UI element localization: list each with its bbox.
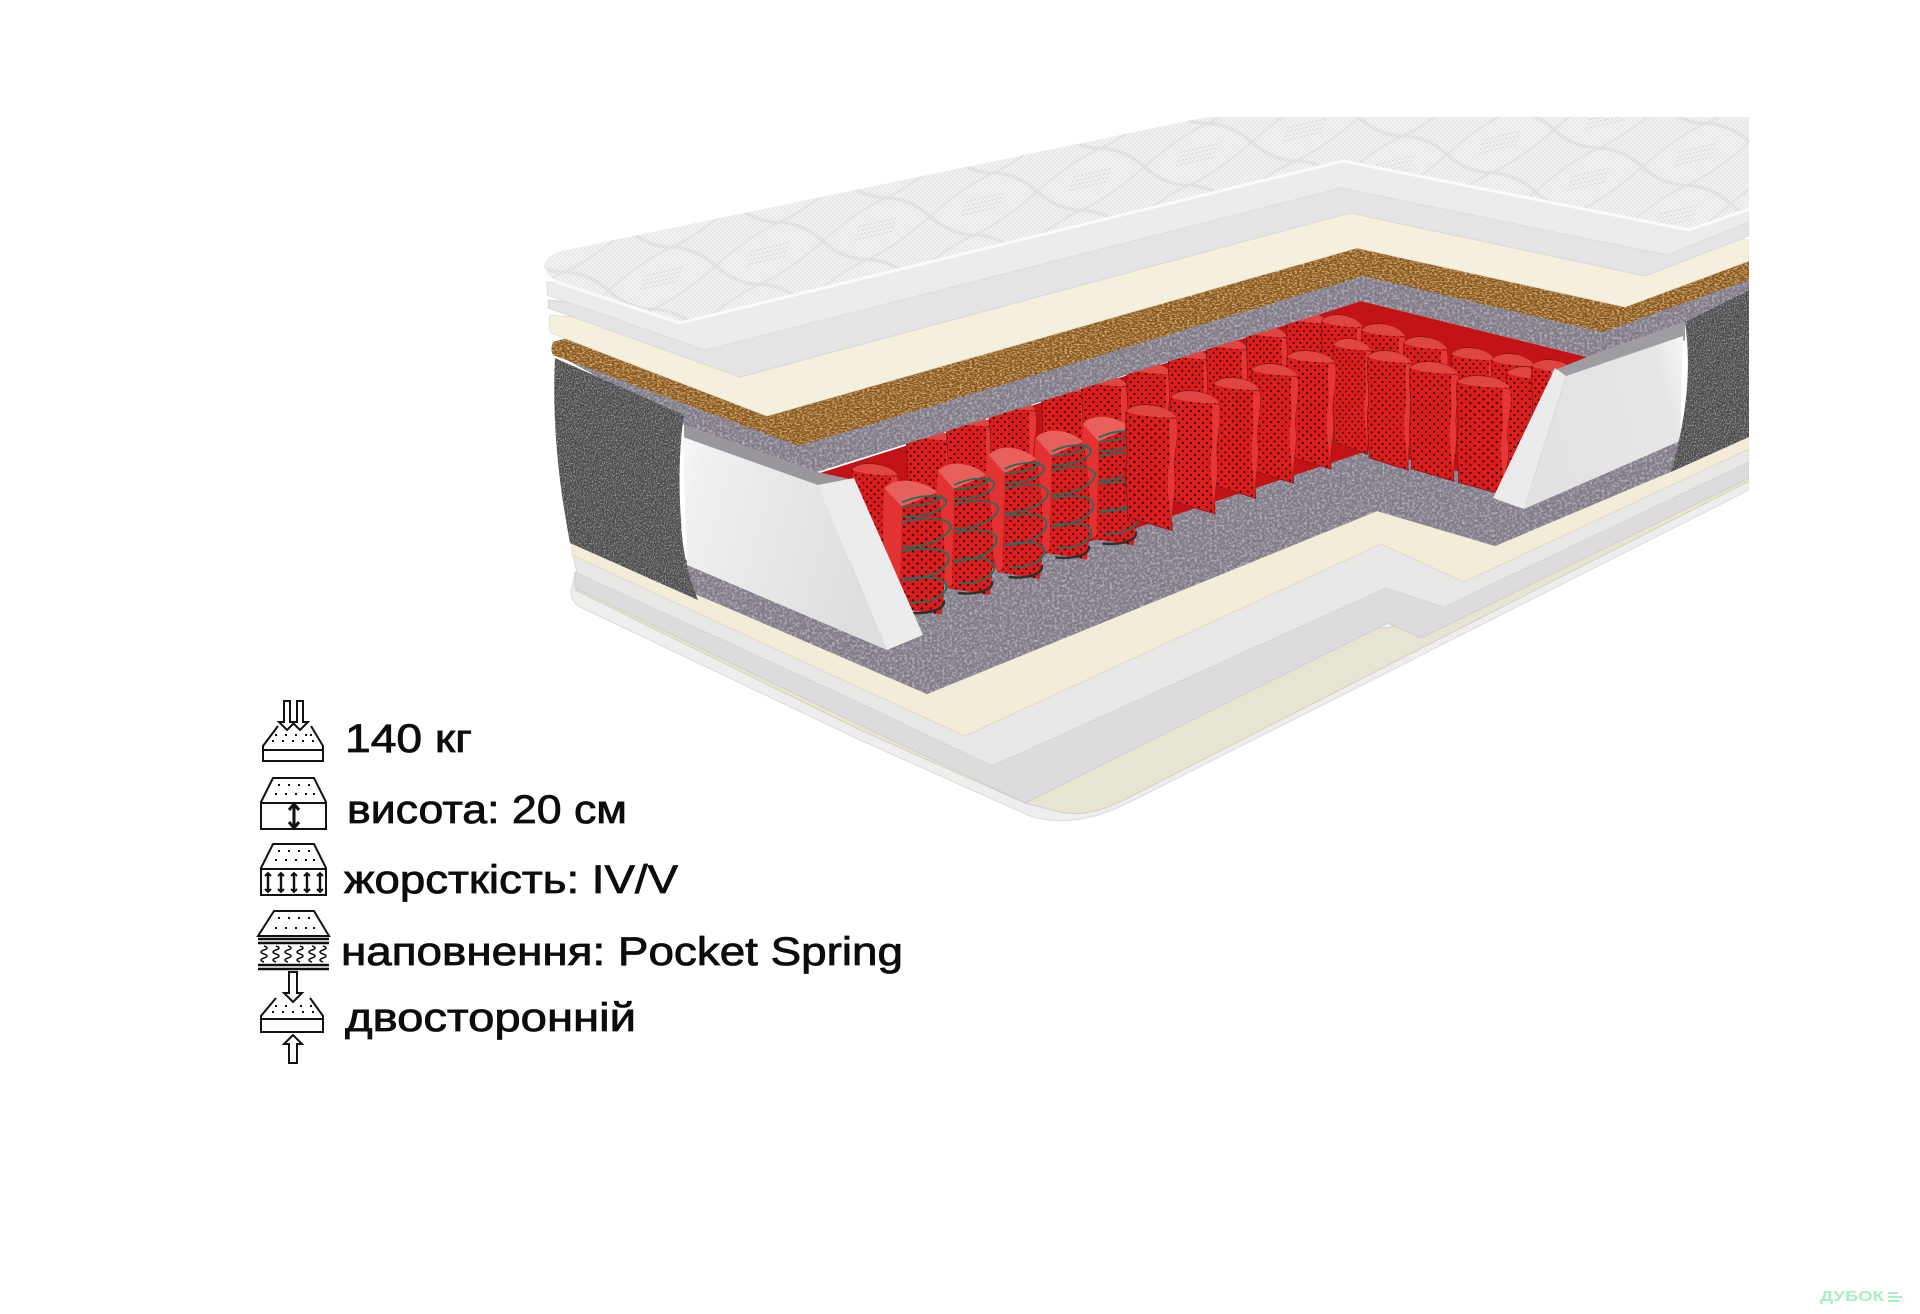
layer: bottom cover [571,470,1749,821]
icon: two-sided mattress [261,972,323,1063]
layer: lower white fabric [575,450,1749,803]
layer: quilted cover [544,117,1749,323]
open pocket spring 2 [936,464,998,595]
text: firmness: жорсткість: IV/V [344,858,678,902]
layer: white fabric 1 [547,150,1749,350]
text: filling: наповнення: Pocket Spring [341,930,903,974]
cavity red backdrop [820,301,1587,600]
spring pockets: front row [883,338,1511,615]
text: load: 140 кг [345,717,472,761]
icon: mattress firmness [261,844,326,895]
layer: floor felt [684,430,1680,694]
open pocket spring 3 [987,448,1048,579]
layer: lower mesh fabric [573,440,1749,766]
side dark fabric: left [554,358,698,600]
open pocket spring 4 [1034,431,1095,559]
mattress cross-section illustration [544,117,1749,821]
layer: coconut coir [552,240,1749,446]
watermark logo: ДУБОК [1820,1288,1885,1305]
layer: lower cream foam [572,436,1749,736]
open pocket spring 1 [883,481,951,615]
side dark fabric: right [1671,290,1749,472]
closed pockets [1333,338,1372,454]
text: two-sided: двосторонній [345,996,636,1040]
side foam block: right [1493,322,1685,509]
layer: white fabric 2 [548,170,1749,377]
layer: beige bottom underlay [575,476,1749,814]
icon: pocket spring filling [258,911,329,969]
side foam block: left [683,425,923,650]
icon: load arrows on mattress [263,701,323,761]
layer: upper cream foam [549,205,1749,416]
text: height: висота: 20 см [347,788,627,832]
spring pockets: back rows [851,310,1576,581]
icon: mattress height [261,778,326,829]
watermark logo [1820,1288,1902,1305]
open pocket spring 5 [1081,417,1142,545]
layer: upper felt [568,262,1749,472]
